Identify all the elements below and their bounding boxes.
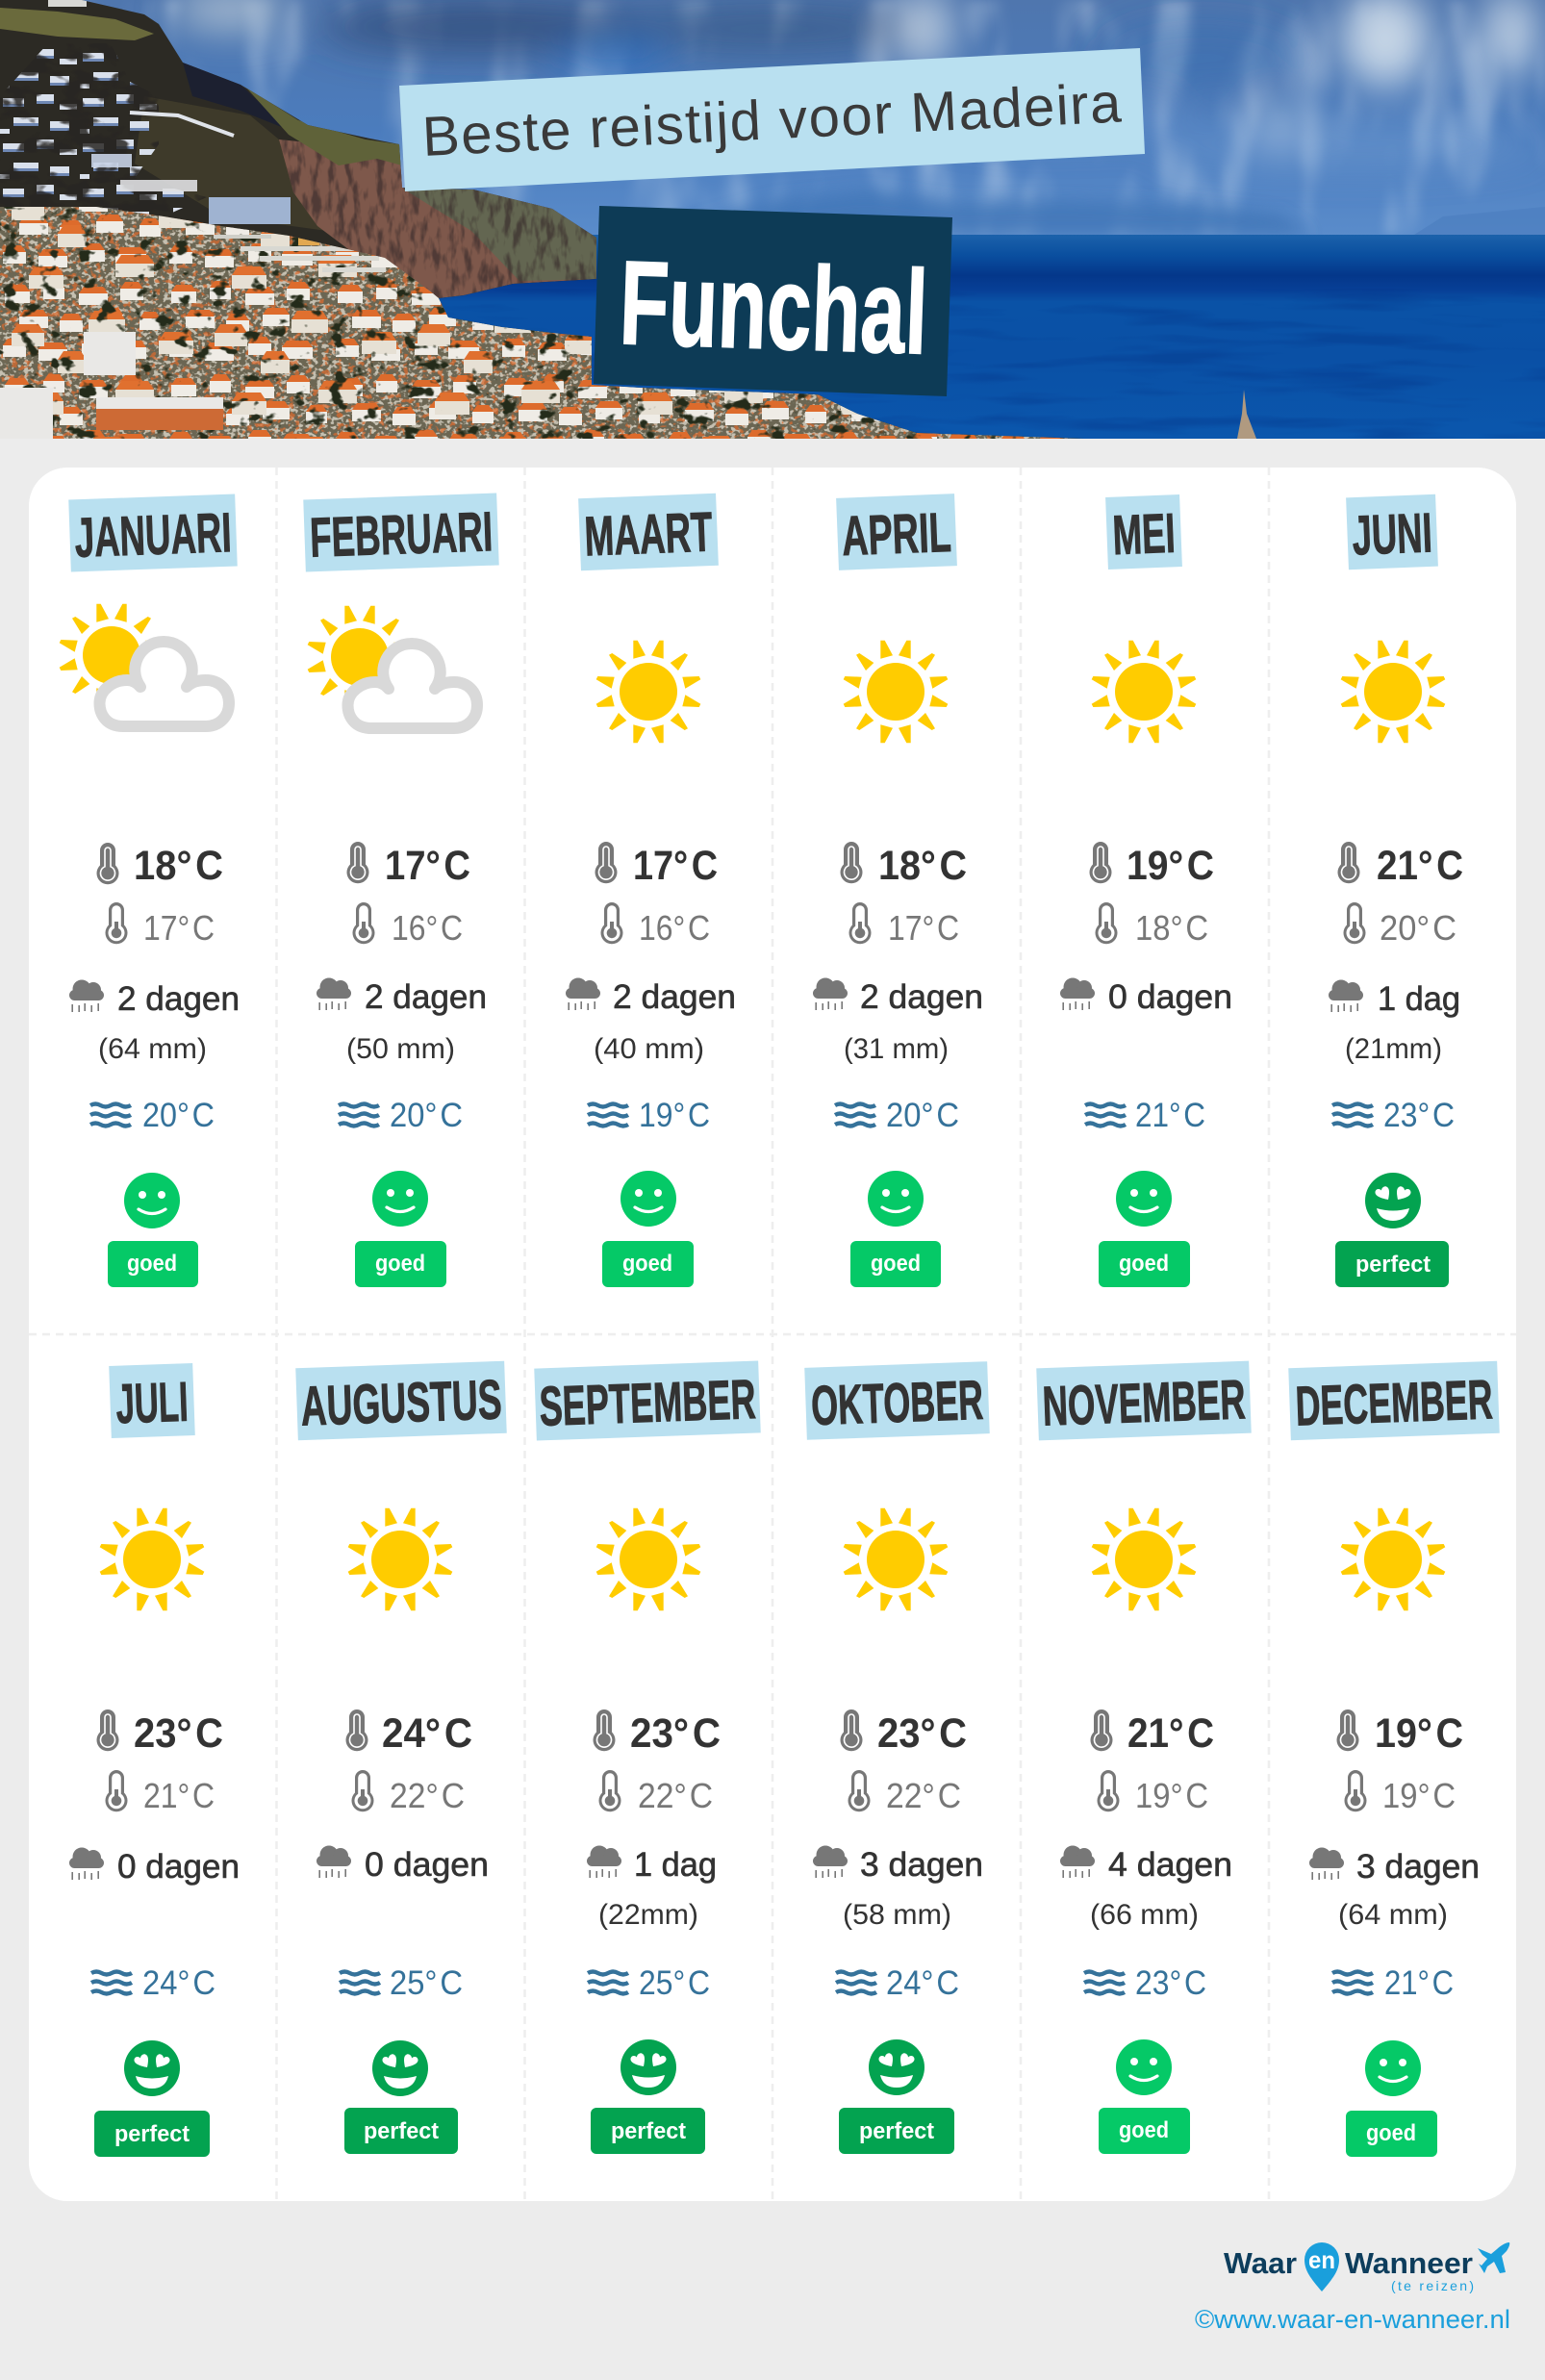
max temperature xyxy=(841,1709,967,1757)
rating: goed: goed xyxy=(1119,2117,1169,2143)
panel: juli xyxy=(69,1363,240,2157)
min temperature: 19°C xyxy=(1382,1776,1456,1815)
max temperature: 19°C xyxy=(1375,1710,1463,1757)
min temperature: 16°C xyxy=(392,908,463,948)
month label: FEBRUARI xyxy=(309,500,494,570)
icon: partly cloudy xyxy=(308,606,477,728)
rating: goed: goed xyxy=(622,1251,672,1277)
min temperature xyxy=(1345,1770,1456,1815)
rating: goed xyxy=(1346,2040,1437,2157)
icon: sun xyxy=(1341,1508,1445,1610)
min temperature: 16°C xyxy=(639,908,710,948)
max temperature: 19°C xyxy=(1127,843,1214,889)
rainfall xyxy=(1309,1847,1480,1931)
rainfall xyxy=(69,979,240,1065)
rainfall: (40 mm) xyxy=(594,1033,704,1065)
month label xyxy=(109,1363,195,1438)
max temperature xyxy=(346,842,470,889)
rating: perfect: perfect xyxy=(364,2118,439,2144)
sea temperature xyxy=(340,1964,463,2002)
white buildings xyxy=(0,235,386,439)
rainfall: 3 dagen xyxy=(860,1846,983,1884)
max temperature: 23°C xyxy=(877,1710,967,1757)
min temperature: 17°C xyxy=(143,908,215,948)
month label xyxy=(1105,494,1182,570)
rainfall: (66 mm) xyxy=(1090,1899,1199,1931)
sea temperature: 25°C xyxy=(639,1964,710,2002)
rainfall xyxy=(813,1845,983,1931)
icon: sun xyxy=(1341,641,1445,743)
rainfall: 1 dag xyxy=(634,1846,717,1884)
rainfall: 4 dagen xyxy=(1108,1846,1232,1884)
max temperature xyxy=(96,843,223,889)
rating: perfect: perfect xyxy=(859,2118,934,2144)
sea temperature xyxy=(836,1964,959,2002)
sea temperature: 21°C xyxy=(1135,1097,1205,1134)
icon: sun xyxy=(100,1508,204,1610)
max temperature xyxy=(96,1709,223,1757)
sea temperature: 24°C xyxy=(142,1964,215,2002)
panel: januari xyxy=(60,494,240,1287)
sea temperature xyxy=(1084,1964,1206,2002)
min temperature xyxy=(352,1770,465,1815)
panel: oktober xyxy=(804,1361,990,2154)
rating: goed xyxy=(850,1171,941,1287)
rating: goed xyxy=(1099,1171,1190,1287)
logo: Waar en Wanneer: Waar xyxy=(1224,2246,1297,2280)
subtitle banner xyxy=(399,48,1145,191)
sea temperature xyxy=(339,1097,463,1134)
month label: JUNI xyxy=(1351,501,1433,568)
icon: sun xyxy=(1092,1508,1196,1610)
rating: perfect: perfect xyxy=(114,2121,190,2147)
lower town xyxy=(0,202,1087,439)
max temperature xyxy=(595,842,718,889)
rating: goed: goed xyxy=(127,1251,177,1277)
min temperature xyxy=(1343,902,1456,948)
rating: goed xyxy=(602,1171,694,1287)
min temperature: 20°C xyxy=(1380,908,1456,948)
min temperature xyxy=(106,1770,215,1815)
rating: goed: goed xyxy=(1366,2120,1416,2146)
sea temperature xyxy=(90,1097,215,1134)
min temperature: 22°C xyxy=(390,1776,465,1815)
rainfall: (64 mm) xyxy=(1338,1899,1448,1931)
rainfall xyxy=(587,1845,717,1931)
sea temperature: 23°C xyxy=(1135,1964,1206,2002)
icon: map pin: en xyxy=(1308,2247,1335,2274)
min temperature: 17°C xyxy=(888,908,959,948)
month label xyxy=(295,1361,507,1440)
sea temperature xyxy=(1332,1964,1454,2002)
rating: perfect xyxy=(94,2040,210,2157)
sea temperature: 23°C xyxy=(1383,1097,1455,1134)
church spire xyxy=(1237,390,1256,439)
rainfall: 2 dagen xyxy=(365,978,487,1016)
rainfall: (31 mm) xyxy=(844,1033,949,1065)
month label xyxy=(578,494,719,570)
rainfall: (50 mm) xyxy=(346,1033,455,1065)
month label: NOVEMBER xyxy=(1042,1368,1247,1438)
rating: goed: goed xyxy=(1119,1251,1169,1277)
min temperature: 19°C xyxy=(1135,1776,1208,1815)
icon: sun xyxy=(844,1508,948,1610)
min temperature: 21°C xyxy=(143,1776,215,1815)
min temperature xyxy=(848,1770,961,1815)
sea temperature: 20°C xyxy=(390,1097,463,1134)
max temperature: 21°C xyxy=(1377,843,1463,889)
logo: Waar en Wanneer: (te reizen) xyxy=(1391,2278,1474,2293)
max temperature xyxy=(346,1709,472,1757)
month label: MAART xyxy=(583,500,714,569)
sea temperature xyxy=(588,1097,710,1134)
rating: perfect: perfect xyxy=(611,2118,686,2144)
title banner xyxy=(594,206,952,396)
sea temperature xyxy=(1332,1097,1455,1134)
min temperature: 22°C xyxy=(638,1776,713,1815)
min temperature xyxy=(1097,1770,1208,1815)
panel: augustus xyxy=(295,1361,507,2154)
month label: JANUARI xyxy=(74,501,233,570)
month label: OKTOBER xyxy=(810,1369,984,1437)
min temperature xyxy=(106,902,215,948)
rainfall xyxy=(566,977,736,1065)
rating: goed: goed xyxy=(375,1251,425,1277)
rating: goed xyxy=(1099,2039,1190,2154)
rainfall: 0 dagen xyxy=(1108,978,1232,1016)
sea temperature xyxy=(588,1964,710,2002)
max temperature xyxy=(1337,1709,1463,1757)
rainfall: 2 dagen xyxy=(613,978,736,1016)
max temperature: 23°C xyxy=(630,1710,721,1757)
max temperature: 17°C xyxy=(385,843,470,889)
rainfall: 0 dagen xyxy=(365,1846,489,1884)
min temperature: 22°C xyxy=(886,1776,961,1815)
rainfall xyxy=(1060,1845,1232,1931)
rating: perfect: perfect xyxy=(1355,1252,1431,1278)
max temperature xyxy=(1091,1709,1214,1757)
rainfall xyxy=(1329,979,1460,1065)
icon: airplane xyxy=(1478,2242,1509,2273)
rainfall: (64 mm) xyxy=(98,1033,207,1065)
rainfall: 2 dagen xyxy=(117,980,240,1018)
month label: APRIL xyxy=(841,501,952,568)
max temperature xyxy=(1337,842,1463,889)
max temperature: 24°C xyxy=(382,1710,472,1757)
sea temperature: 24°C xyxy=(886,1964,959,2002)
panel: november xyxy=(1036,1361,1252,2154)
max temperature: 21°C xyxy=(1127,1710,1214,1757)
sea temperature: 25°C xyxy=(390,1964,463,2002)
panel: februari xyxy=(303,494,499,1287)
rating: perfect xyxy=(1335,1173,1449,1287)
logo: Waar en Wanneer xyxy=(1224,2242,1509,2293)
sea temperature xyxy=(835,1097,959,1134)
month label xyxy=(1036,1361,1252,1440)
rainfall: 3 dagen xyxy=(1356,1848,1480,1886)
icon: sun xyxy=(1092,641,1196,743)
icon: map pin xyxy=(1304,2242,1339,2291)
min temperature xyxy=(848,902,959,948)
hillside houses xyxy=(0,49,206,215)
rainfall xyxy=(813,977,983,1065)
rating: perfect xyxy=(839,2039,954,2154)
icon: sun xyxy=(596,641,700,743)
sea temperature: 20°C xyxy=(142,1097,215,1134)
sea temperature: 20°C xyxy=(886,1097,959,1134)
rainfall xyxy=(317,977,487,1065)
rating: perfect xyxy=(591,2039,705,2154)
panel: climate table xyxy=(29,468,1516,2201)
max temperature: 18°C xyxy=(134,843,223,889)
panel: mei xyxy=(1060,494,1232,1287)
title: Funchal: Funchal xyxy=(618,237,930,380)
rainfall: 2 dagen xyxy=(860,978,983,1016)
max temperature xyxy=(841,842,967,889)
max temperature xyxy=(593,1709,721,1757)
month label xyxy=(804,1361,990,1440)
min temperature xyxy=(600,902,710,948)
month label xyxy=(836,494,957,570)
rainfall: 0 dagen xyxy=(117,1848,240,1886)
copyright url: ©www.waar-en-wanneer.nl xyxy=(1195,2305,1510,2334)
min temperature xyxy=(598,1770,713,1815)
sea temperature xyxy=(1085,1097,1205,1134)
month label xyxy=(1346,494,1438,570)
month label xyxy=(303,494,499,571)
rainfall xyxy=(1060,977,1232,1016)
max temperature: 18°C xyxy=(878,843,967,889)
rainfall xyxy=(317,1845,489,1884)
rating: perfect xyxy=(344,2040,458,2154)
icon: partly cloudy xyxy=(60,604,229,726)
min temperature xyxy=(352,902,463,948)
sea temperature: 19°C xyxy=(639,1097,710,1134)
sea temperature xyxy=(91,1964,215,2002)
max temperature: 23°C xyxy=(134,1710,223,1757)
month label: MEI xyxy=(1111,502,1177,567)
subtitle: Beste reistijd voor Madeira xyxy=(420,72,1124,168)
hill body xyxy=(135,96,327,231)
hero photo: Funchal coast xyxy=(0,0,1545,439)
panel: maart xyxy=(566,494,736,1287)
month label: JULI xyxy=(114,1371,190,1435)
month label: SEPTEMBER xyxy=(539,1368,757,1438)
min temperature: 18°C xyxy=(1135,908,1208,948)
max temperature: 17°C xyxy=(633,843,718,889)
panel: april xyxy=(813,494,983,1287)
min temperature xyxy=(1095,902,1208,948)
rating: goed xyxy=(108,1173,198,1287)
rainfall: (22mm) xyxy=(598,1899,698,1931)
cliff face xyxy=(269,135,601,303)
sea temperature: 21°C xyxy=(1384,1964,1454,2002)
icon: sun xyxy=(844,641,948,743)
month label: AUGUSTUS xyxy=(300,1368,503,1438)
icon: sun xyxy=(348,1508,452,1610)
rainfall: 1 dag xyxy=(1378,980,1460,1018)
rainfall: (58 mm) xyxy=(843,1899,951,1931)
icon: sun xyxy=(596,1508,700,1610)
max temperature xyxy=(1089,842,1214,889)
panel: juni xyxy=(1329,494,1463,1287)
logo: Waar en Wanneer: Wanneer xyxy=(1345,2246,1473,2280)
rainfall: (21mm) xyxy=(1345,1033,1442,1065)
panel: december xyxy=(1288,1361,1500,2157)
panel: september xyxy=(534,1360,761,2154)
month label xyxy=(68,494,238,571)
rating: goed: goed xyxy=(871,1251,921,1277)
rating: goed xyxy=(355,1171,446,1287)
month label xyxy=(534,1360,761,1441)
